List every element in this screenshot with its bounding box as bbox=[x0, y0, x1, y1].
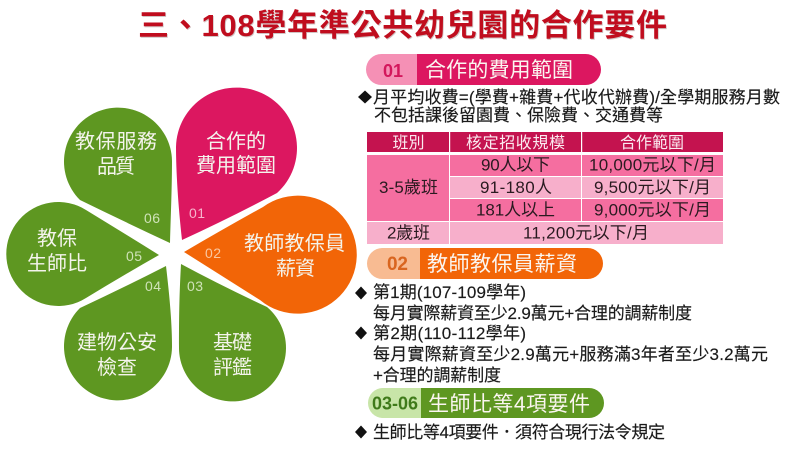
petal 05: teacher-student ratio: 生師比 bbox=[27, 252, 87, 275]
petal 06: service quality: 品質 bbox=[97, 155, 135, 178]
table header: 合作範圍 bbox=[620, 133, 684, 152]
table header: 班別 bbox=[392, 134, 424, 152]
section 01 heading pill: 01 bbox=[383, 61, 403, 81]
section 02 description text: 第1期(107-109學年) bbox=[373, 283, 526, 302]
petal 04: building safety bbox=[64, 266, 172, 400]
table row: 3-5 age class: 3-5歲班 bbox=[379, 178, 438, 197]
petal 05: teacher-student ratio bbox=[6, 202, 159, 306]
petal 02: teacher salary: 教師教保員 bbox=[244, 232, 345, 255]
petal 03: basic evaluation: 評鑑 bbox=[213, 356, 252, 379]
section 01 heading pill bbox=[366, 54, 601, 85]
petal 02: teacher salary bbox=[184, 196, 357, 314]
petal 06: service quality: 教保服務 bbox=[75, 130, 157, 153]
petal 05: teacher-student ratio: 05 bbox=[126, 248, 142, 264]
table row: 91-180: 9,500元以下/月 bbox=[594, 178, 711, 197]
section 02 description text: 每月實際薪資至少2.9萬元+服務滿3年者至少3.2萬元 bbox=[373, 345, 768, 364]
table row: 2 age class: 2歲班 bbox=[387, 224, 430, 242]
table row: 2 age class bbox=[367, 222, 723, 244]
section 02 description text: +合理的調薪制度 bbox=[373, 366, 501, 385]
section 03-06 description text: 生師比等4項要件．須符合現行法令規定 bbox=[373, 423, 665, 442]
table header bbox=[367, 132, 723, 152]
section 02 description text bbox=[355, 283, 768, 385]
section 03-06 heading pill bbox=[368, 388, 604, 418]
petal 03: basic evaluation bbox=[179, 264, 286, 401]
fee table bbox=[367, 132, 723, 244]
petal 02: teacher salary: 02 bbox=[205, 245, 221, 261]
title: 三、108學年準公共幼兒園的合作要件 bbox=[139, 9, 668, 44]
section 02 description text: 第2期(110-112學年) bbox=[373, 324, 526, 343]
table row: 90 or fewer: 10,000元以下/月 bbox=[589, 156, 716, 174]
petal 03: basic evaluation: 基礎 bbox=[213, 331, 252, 354]
petal 03: basic evaluation: 03 bbox=[187, 278, 203, 294]
table row: 2 age class: 11,200元以下/月 bbox=[523, 224, 649, 242]
petal 01: cost scope: 合作的 bbox=[206, 130, 266, 153]
section 02 heading pill bbox=[367, 248, 603, 279]
section 02 description text: 每月實際薪資至少2.9萬元+合理的調薪制度 bbox=[373, 304, 692, 323]
petal 02: teacher salary: 薪資 bbox=[276, 257, 315, 280]
table row: 3-5 age class bbox=[367, 155, 449, 221]
table row: 181 or more: 181人以上 bbox=[476, 200, 555, 220]
table row: 181 or more: 9,000元以下/月 bbox=[594, 200, 711, 220]
petal 04: building safety: 04 bbox=[145, 278, 161, 294]
section 01 heading pill: 合作的費用範圍 bbox=[425, 59, 573, 82]
section 03-06 heading pill: 生師比等4項要件 bbox=[428, 393, 590, 416]
table row: 91-180 bbox=[450, 177, 723, 198]
section 01 description text: 不包括課後留園費、保險費、交通費等 bbox=[374, 106, 663, 125]
table row: 90 or fewer: 90人以下 bbox=[481, 156, 550, 174]
section 03-06 heading pill: 03-06 bbox=[372, 394, 418, 414]
petal 04: building safety: 檢查 bbox=[97, 356, 137, 379]
section 01 description text: 月平均收費=(學費+雜費+代收代辦費)/全學期服務月數 bbox=[373, 88, 780, 107]
table row: 91-180: 91-180人 bbox=[480, 178, 552, 197]
title: 三、108學年準公共幼兒園的合作要件 bbox=[138, 8, 667, 43]
table row: 181 or more bbox=[450, 199, 723, 221]
table header: 核定招收規模 bbox=[466, 134, 565, 152]
section 01 description text bbox=[358, 88, 780, 125]
flower diagram bbox=[6, 88, 357, 401]
table row: 90 or fewer bbox=[450, 155, 723, 176]
petal 01: cost scope bbox=[176, 88, 297, 240]
petal 01: cost scope: 01 bbox=[189, 205, 205, 221]
petal 06: service quality bbox=[64, 108, 172, 243]
petal 04: building safety: 建物公安 bbox=[77, 331, 157, 354]
section 02 heading pill: 教師教保員薪資 bbox=[427, 253, 577, 276]
section 02 heading pill: 02 bbox=[387, 254, 408, 275]
petal 05: teacher-student ratio: 教保 bbox=[37, 227, 77, 250]
petal 01: cost scope: 費用範圍 bbox=[196, 154, 276, 177]
petal 06: service quality: 06 bbox=[144, 210, 160, 226]
